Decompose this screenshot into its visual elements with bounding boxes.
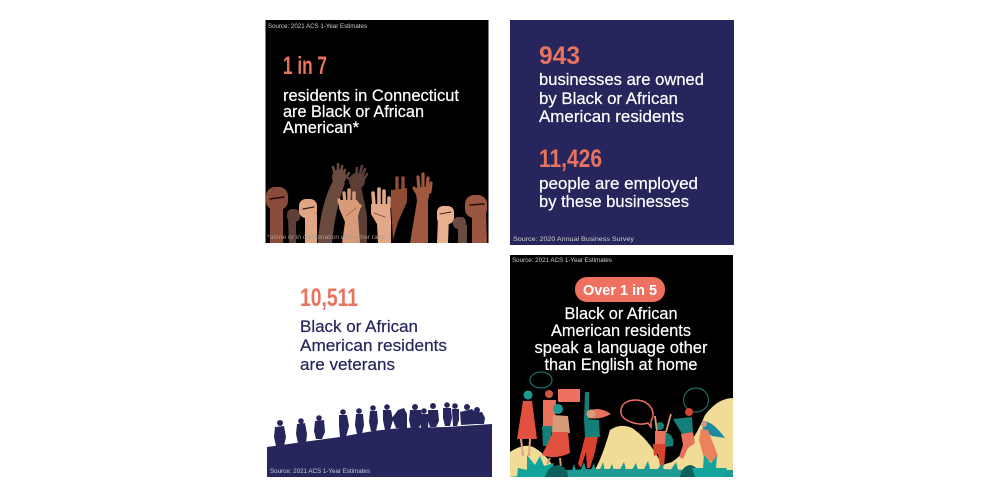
text: veterans description: [300, 318, 447, 374]
text: residents description: residents in Connecticut: [283, 87, 459, 105]
text: residents description: [283, 87, 459, 137]
illustration: soldiers on a hill: [267, 402, 492, 477]
badge: over 1 in 5: [575, 277, 665, 302]
text: veterans description: are veterans: [300, 356, 395, 374]
text: veterans description: Black or African: [300, 318, 418, 336]
panel: 1 in 7 residents: [266, 20, 488, 243]
fist: small dark right: [453, 217, 467, 243]
hand: tall open: [410, 174, 431, 243]
text: language description: than English at home: [544, 356, 698, 374]
source note: panel 3: Source: 2021 ACS 1-Year Estimates: [270, 468, 371, 475]
plants and grass: [510, 455, 733, 477]
text: language description: American residents: [551, 322, 691, 340]
panel: language at home: [510, 255, 733, 477]
figure: woman with raised arm: [578, 392, 611, 468]
text: employment description: people are employed: [539, 175, 698, 193]
text: businesses description: American residents: [539, 108, 684, 126]
fist: left: [266, 187, 288, 243]
illustration: raised fists and hands: [266, 164, 487, 243]
hand: open dark right: [348, 166, 367, 243]
text: language description: Black or African: [564, 305, 678, 323]
statistic: 1 in 7: 1 in 7: [283, 52, 327, 80]
text: employment description: [539, 175, 698, 211]
source note: panel 1: Source: 2021 ACS 1-Year Estimates: [268, 23, 368, 30]
figure: dancing woman: [653, 414, 673, 466]
hand: two fingers: [391, 178, 407, 240]
fist: light right: [437, 206, 454, 243]
speech bubbles: [530, 372, 708, 427]
hand: open dark left: [318, 164, 349, 243]
text: language description: speak a language other: [534, 339, 708, 357]
text: residents description: are Black or African: [283, 103, 424, 121]
statistic: 11,426: 11,426: [539, 145, 602, 173]
text: language description: [534, 305, 708, 374]
badge: over 1 in 5: Over 1 in 5: [583, 282, 657, 299]
text: businesses description: businesses are owned: [539, 71, 704, 89]
panel: veterans: [267, 284, 492, 477]
panel: businesses owned: [510, 20, 734, 245]
footnote: alone or in combination: *alone or in combination with other race: [267, 234, 385, 241]
statistic: 943: 943: [539, 42, 580, 70]
statistic: 10,511: 10,511: [300, 284, 358, 312]
text: veterans description: American residents: [300, 337, 447, 355]
figure: woman in red dress: [517, 390, 537, 456]
fist: far right: [465, 195, 487, 243]
text: residents description: American*: [283, 119, 360, 137]
fist: small dark: [287, 209, 300, 243]
hand: open tan: [339, 190, 361, 243]
figure: woman with flowing hair: [699, 421, 725, 462]
source note: panel 4: Source: 2021 ACS 1-Year Estimates: [512, 257, 613, 264]
text: businesses description: [539, 71, 704, 126]
figure: woman in red skirt: [542, 404, 570, 468]
illustration: people talking among hills: [510, 372, 733, 477]
hand: open light: [371, 189, 391, 243]
figure: jumping man: [673, 408, 695, 459]
text: businesses description: by Black or African: [539, 90, 678, 108]
text: employment description: by these businesses: [539, 193, 689, 211]
source note: panel 2: Source: 2020 Annual Business Survey: [513, 236, 635, 243]
figure: man in coral shirt: [542, 390, 556, 446]
fist: light: [299, 199, 317, 243]
